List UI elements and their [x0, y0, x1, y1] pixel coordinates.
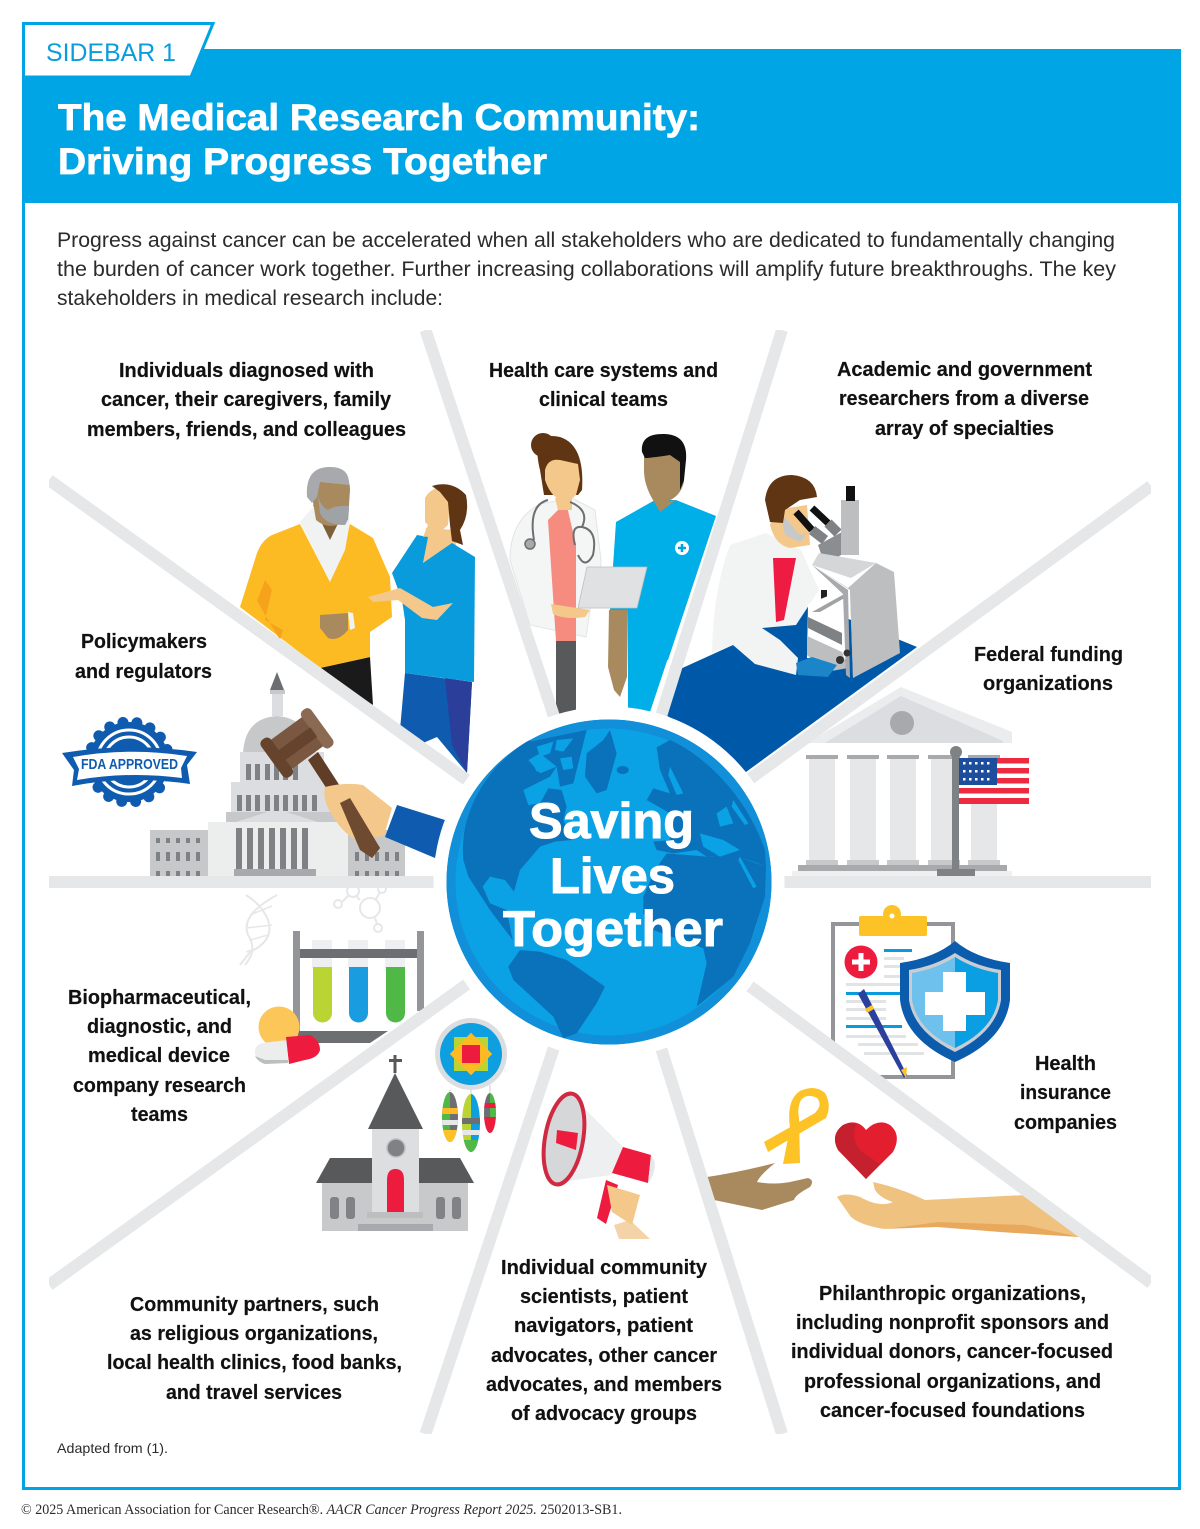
label: biopharmaceutical: company research — [73, 1075, 246, 1097]
globe label: Saving Lives Together — [503, 793, 723, 957]
illustration: health care team — [510, 433, 716, 714]
dna and molecule — [240, 885, 386, 965]
label: philanthropic organizations: Philanthropic organizations, — [819, 1283, 1086, 1305]
label: individuals diagnosed: Individuals diagnosed with — [119, 360, 374, 382]
label: biopharmaceutical: diagnostic, and — [87, 1016, 232, 1038]
shield — [900, 941, 1010, 1062]
label: health care systems: clinical teams — [539, 389, 668, 411]
intro text: the burden of cancer work together. Further increasing collaborations will amplify future breakthroughs. The key — [57, 258, 1117, 281]
label: philanthropic organizations: cancer-focused foundations — [820, 1400, 1085, 1422]
copyright footer: © 2025 American Association for Cancer Research®. AACR Cancer Progress Report 2025. 2502013-SB1. — [21, 1502, 622, 1518]
label: community partners — [107, 1294, 402, 1404]
label: biopharmaceutical: Biopharmaceutical, — [68, 987, 251, 1009]
intro text: Progress against cancer can be accelerated when all stakeholders who are dedicated to fundamentally changing — [57, 229, 1115, 252]
label: philanthropic organizations: individual donors, cancer-focused — [791, 1341, 1113, 1363]
church — [316, 1055, 474, 1231]
brown hand — [707, 1163, 812, 1210]
label: health care systems — [489, 360, 718, 411]
label: biopharmaceutical: teams — [131, 1104, 188, 1126]
label: health insurance: insurance — [1020, 1082, 1111, 1104]
microscope — [796, 486, 900, 678]
federal building — [792, 687, 1012, 877]
label: policymakers: and regulators — [75, 661, 212, 683]
label: individual community scientists: navigators, patient — [514, 1315, 693, 1337]
label: health insurance — [1014, 1053, 1117, 1134]
illustration: capitol building with gavel — [150, 672, 445, 876]
spokes — [49, 330, 1151, 1434]
title — [58, 97, 700, 182]
label: individual community scientists: scientists, patient — [520, 1286, 688, 1308]
label: biopharmaceutical: medical device — [88, 1045, 230, 1067]
label: individual community scientists: of advocacy groups — [511, 1403, 697, 1425]
capitol — [150, 672, 405, 876]
illustration: megaphone — [537, 1090, 655, 1239]
label: health insurance: companies — [1014, 1112, 1117, 1134]
ribbon — [764, 1088, 829, 1164]
title: Driving Progress Together — [58, 141, 547, 182]
label: philanthropic organizations: including nonprofit sponsors and — [796, 1312, 1109, 1334]
intro text — [57, 229, 1117, 310]
nurse in scrubs — [578, 434, 716, 712]
title: The Medical Research Community: — [58, 97, 700, 138]
american flag — [937, 746, 1029, 876]
label: health insurance: Health — [1035, 1053, 1096, 1075]
illustration: church and dreamcatcher — [316, 1018, 507, 1231]
illustration: ribbon, heart and hands — [707, 1088, 1080, 1237]
doctor — [510, 433, 601, 714]
label: individual community scientists: advocates, and members — [486, 1374, 722, 1396]
globe label: Saving Lives Together: Lives — [550, 848, 675, 904]
illustration: test tubes and pills — [240, 885, 424, 1064]
label: community partners: local health clinics, food banks, — [107, 1352, 402, 1374]
label: individual community scientists — [486, 1257, 722, 1425]
globe — [434, 706, 784, 1058]
source note: Adapted from (1). — [57, 1440, 168, 1456]
label: academic and government researchers: array of specialties — [875, 418, 1054, 440]
label: community partners: and travel services — [166, 1382, 342, 1404]
FDA approved badge: FDA APPROVED — [81, 756, 178, 773]
gavel and hand — [258, 706, 445, 858]
label: individuals diagnosed — [87, 360, 406, 441]
scientist — [712, 475, 819, 675]
sidebar tab: SIDEBAR 1 — [46, 39, 176, 67]
tube rack — [293, 931, 424, 1043]
label: academic and government researchers — [837, 359, 1092, 440]
illustration: clipboard and shield — [833, 905, 1010, 1078]
heart — [835, 1122, 897, 1179]
illustration: researcher at microscope — [666, 475, 917, 772]
label: academic and government researchers: Academic and government — [837, 359, 1092, 381]
label: individuals diagnosed: members, friends, and colleagues — [87, 419, 406, 441]
label: philanthropic organizations — [791, 1283, 1113, 1422]
clipboard — [833, 905, 953, 1078]
label: health care systems: Health care systems and — [489, 360, 718, 382]
label: biopharmaceutical — [68, 987, 251, 1126]
pills — [255, 1006, 320, 1064]
man with yellow sweater — [240, 467, 392, 705]
label: academic and government researchers: researchers from a diverse — [839, 388, 1089, 410]
label: federal funding: organizations — [983, 673, 1113, 695]
header banner — [22, 49, 1181, 203]
globe label: Saving Lives Together: Saving — [529, 793, 694, 849]
label: individuals diagnosed: cancer, their caregivers, family — [101, 389, 392, 411]
label: philanthropic organizations: professional organizations, and — [804, 1371, 1101, 1393]
label: community partners: as religious organizations, — [130, 1323, 378, 1345]
dreamcatcher — [435, 1018, 507, 1152]
light hand — [837, 1182, 1080, 1237]
nurse in blue scrubs — [368, 484, 475, 773]
sidebar tab — [24, 24, 213, 77]
label: federal funding: Federal funding — [974, 644, 1123, 666]
globe label: Saving Lives Together: Together — [503, 901, 723, 957]
label: policymakers: Policymakers — [81, 631, 207, 653]
intro text: stakeholders in medical research include: — [57, 287, 443, 310]
label: federal funding — [974, 644, 1123, 695]
label: individual community scientists: Individual community — [501, 1257, 708, 1279]
illustration: patient and caregiver — [240, 467, 475, 773]
label: policymakers — [75, 631, 212, 683]
label: community partners: Community partners, such — [130, 1294, 379, 1316]
tablet — [578, 567, 647, 608]
FDA approved badge — [62, 722, 197, 802]
label: individual community scientists: advocates, other cancer — [491, 1345, 717, 1367]
illustration: federal building with flag — [792, 687, 1029, 877]
